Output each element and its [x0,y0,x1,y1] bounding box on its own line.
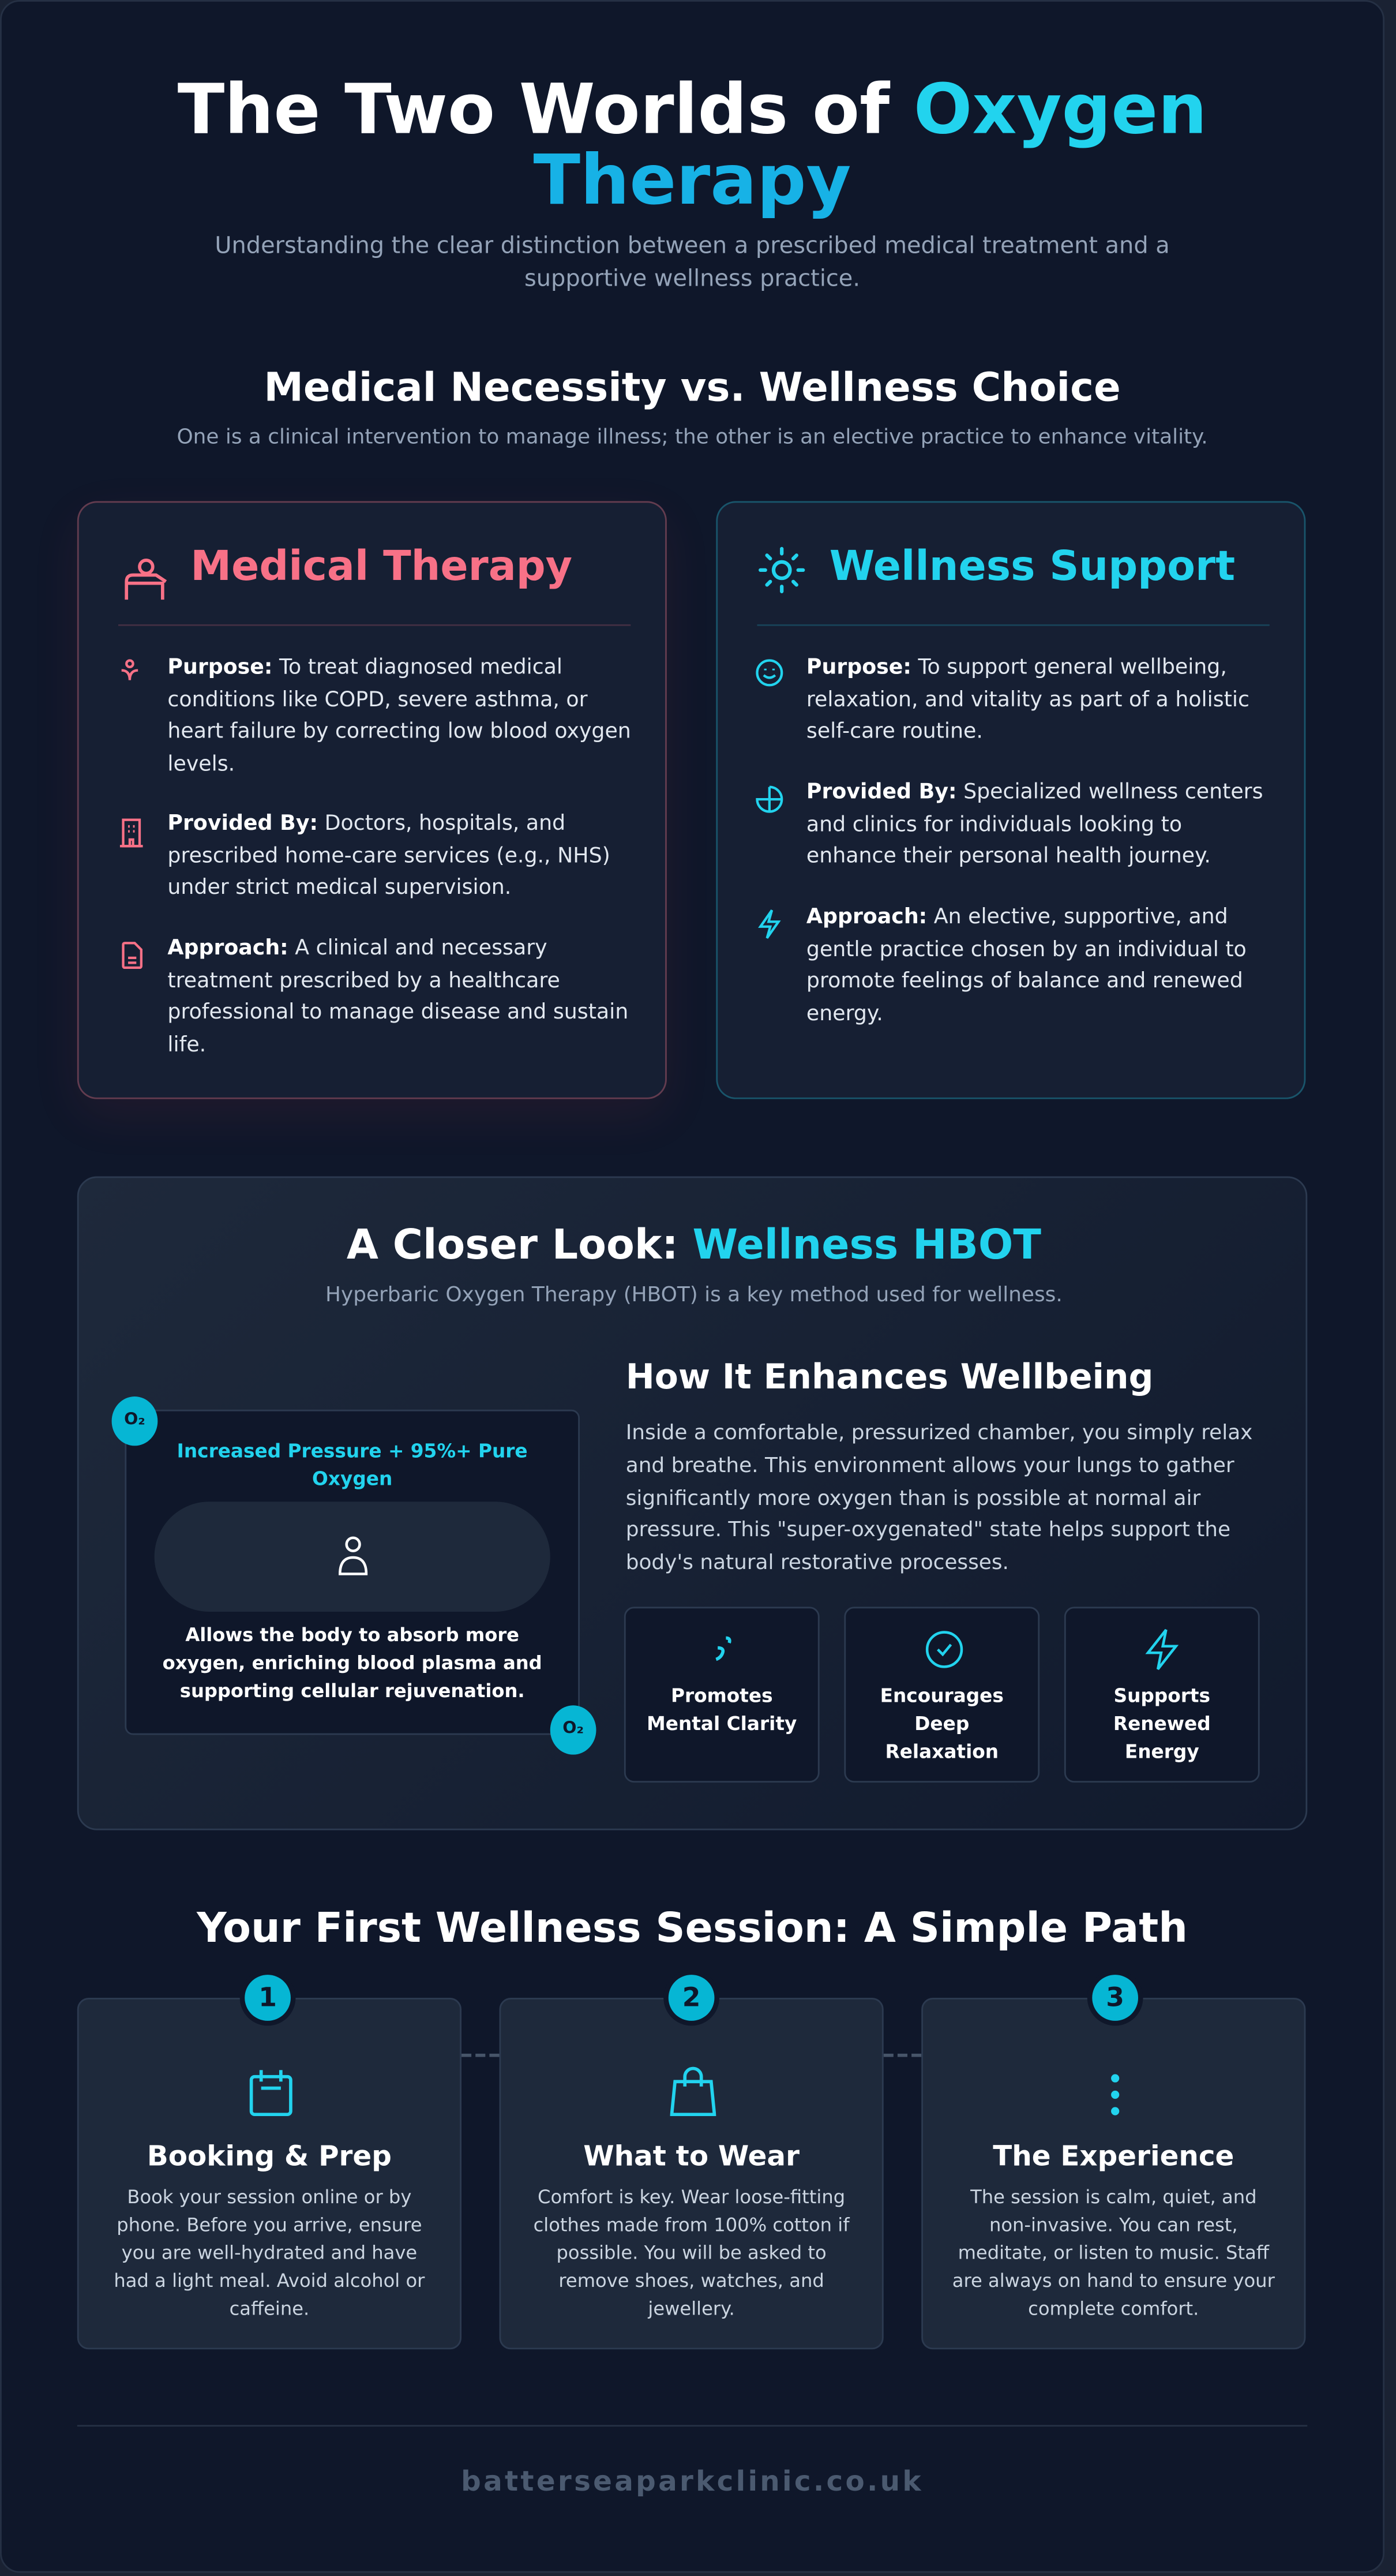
chamber caption: supporting cellular rejuvenation. [180,1681,525,1702]
step 1: booking & prep [77,1998,461,2349]
item: approach: energy. [806,1002,883,1027]
heading: how it enhances: How It Enhances Wellbeing [626,1357,1153,1396]
title: Therapy [533,140,851,220]
item: purpose: Purpose: To support general wellbeing, [806,656,1227,680]
step 3: the experience [921,1998,1305,2349]
feature: renewed energy: Energy [1125,1740,1199,1763]
step 3: the experience: complete comfort. [1028,2298,1199,2320]
item: approach: treatment prescribed by a healthcare [167,969,560,993]
paragraph: explanation: body's natural restorative processes. [626,1549,1009,1574]
item: purpose: relaxation, and vitality as part of a holistic [806,688,1249,712]
item: approach: life. [167,1033,206,1058]
chamber caption: oxygen, enriching blood plasma and [163,1653,542,1674]
step 1: booking & prep: Book your session online or by [127,2186,411,2208]
chamber label: Increased Pressure + 95%+ Pure [177,1439,528,1462]
item: provided by: Provided By: Specialized wellness centers [806,780,1263,805]
item: provided by [756,780,1263,870]
feature: mental clarity: Mental Clarity [647,1712,797,1735]
feature: mental clarity: Promotes [671,1684,773,1707]
heading: closer look: A Closer Look: Wellness HBOT [347,1220,1041,1268]
feature: mental clarity [624,1607,820,1783]
feature: deep relaxation: Deep [914,1712,969,1735]
step 2: what to wear: Comfort is key. Wear loose-fitting [538,2186,845,2208]
step 1: booking & prep: Booking & Prep [147,2141,392,2174]
step 3: the experience: are always on hand to ensure your [952,2271,1275,2292]
feature: deep relaxation: Encourages [880,1684,1004,1707]
item: provided by: under strict medical supervision. [167,876,511,901]
panel: wellness support [716,501,1305,1099]
subtitle [215,233,1170,293]
icon: O2 badge top [112,1396,157,1446]
heading: medical therapy: Medical Therapy [190,542,572,590]
step 1: booking & prep: phone. Before you arrive, ensure [117,2215,422,2236]
section subtext: One is a clinical intervention to manage illness; the other is an elective practice to enhance vitality. [177,424,1208,448]
badge 1: 1 [258,1982,277,2013]
section heading: medical vs wellness: Medical Necessity vs. Wellness Choice [264,365,1121,411]
step 3: the experience: The Experience [993,2141,1234,2174]
item: approach: Approach: A clinical and necessary [167,937,547,961]
item: purpose: Purpose: To treat diagnosed medical [167,656,562,680]
icon: O2 badge bottom: O₂ [562,1720,584,1738]
hbot subtext: Hyperbaric Oxygen Therapy (HBOT) is a key method used for wellness. [325,1282,1063,1306]
feature: renewed energy: Renewed [1113,1712,1211,1735]
badge 2: 2 [682,1982,700,2013]
title [178,69,1207,220]
item: provided by [120,811,610,901]
paragraph: explanation [626,1420,1252,1574]
panel: medical therapy [77,501,667,1099]
chamber pill with person [155,1502,550,1612]
connector arrows [461,2054,500,2057]
feature: renewed energy [1064,1607,1260,1783]
paragraph: explanation: pressure. This "super-oxygenated" state helps support the [626,1517,1230,1542]
item: purpose: self-care routine. [806,720,983,744]
paragraph: explanation: Inside a comfortable, pressurized chamber, you simply relax [626,1420,1252,1444]
item: provided by: prescribed home-care services (e.g., NHS) [167,844,610,868]
item: approach: gentle practice chosen by an individual to [806,938,1247,962]
item: provided by: and clinics for individuals looking to [806,813,1182,837]
panel: HBOT closer look [77,1176,1307,1830]
heading: wellness support: Wellness Support [830,542,1235,590]
step 3: the experience: meditate, or listen to music. Staff [958,2242,1269,2264]
icon: sun [759,547,805,593]
feature: deep relaxation [844,1607,1040,1783]
chamber label: Oxygen [312,1467,392,1490]
icon: O2 badge top: O₂ [124,1411,145,1429]
step 3: the experience: non-invasive. You can rest, [989,2215,1238,2236]
badge 1 [245,1975,291,2021]
step 2: what to wear: What to Wear [583,2141,800,2174]
badge 3 [1092,1975,1138,2021]
chamber caption [163,1625,542,1702]
step 3: the experience: The session is calm, quiet, and [970,2186,1257,2208]
item: approach [758,905,1247,1027]
item: approach: promote feelings of balance and renewed [806,969,1243,994]
icon: O2 badge bottom [550,1705,596,1755]
chamber label [177,1439,528,1490]
item: provided by: enhance their personal health journey. [806,845,1211,870]
subtitle: Understanding the clear distinction between a prescribed medical treatment and a [215,233,1170,260]
step 2: what to wear: clothes made from 100% cotton if [534,2215,850,2236]
step 2: what to wear: remove shoes, watches, and [558,2271,824,2292]
feature: renewed energy: Supports [1113,1684,1210,1707]
item: purpose [121,656,631,777]
step 1: booking & prep: caffeine. [230,2298,309,2320]
icon: medical person [125,559,167,600]
step 2: what to wear: possible. You will be asked to [556,2242,827,2264]
item: purpose: conditions like COPD, severe asthma, or [167,688,588,712]
step 2: what to wear [500,1998,884,2349]
title: The Two Worlds of Oxygen [178,69,1207,149]
badge 3: 3 [1106,1982,1124,2013]
item: approach: Approach: An elective, supportive, and [806,905,1228,930]
step 2: what to wear: jewellery. [648,2298,735,2320]
feature: deep relaxation: Relaxation [885,1740,999,1763]
item: approach [122,937,628,1058]
footer url: batterseaparkclinic.co.uk [461,2466,924,2499]
step 1: booking & prep: you are well-hydrated and have [122,2242,417,2264]
item: approach: professional to manage disease and sustain [167,1001,628,1025]
subtitle: supportive wellness practice. [524,266,860,293]
section heading: first session: Your First Wellness Session: A Simple Path [197,1904,1188,1952]
item: purpose: heart failure by correcting low blood oxygen [167,720,631,744]
chamber caption: Allows the body to absorb more [185,1625,519,1646]
item: provided by: Provided By: Doctors, hospitals, and [167,811,565,836]
item: purpose [756,656,1249,744]
paragraph: explanation: and breathe. This environment allows your lungs to gather [626,1452,1234,1477]
paragraph: explanation: significantly more oxygen than is possible at normal air [626,1485,1200,1509]
chamber diagram [112,1396,596,1755]
step 1: booking & prep: had a light meal. Avoid alcohol or [114,2271,425,2292]
item: purpose: levels. [167,752,235,777]
badge 2 [669,1975,714,2021]
